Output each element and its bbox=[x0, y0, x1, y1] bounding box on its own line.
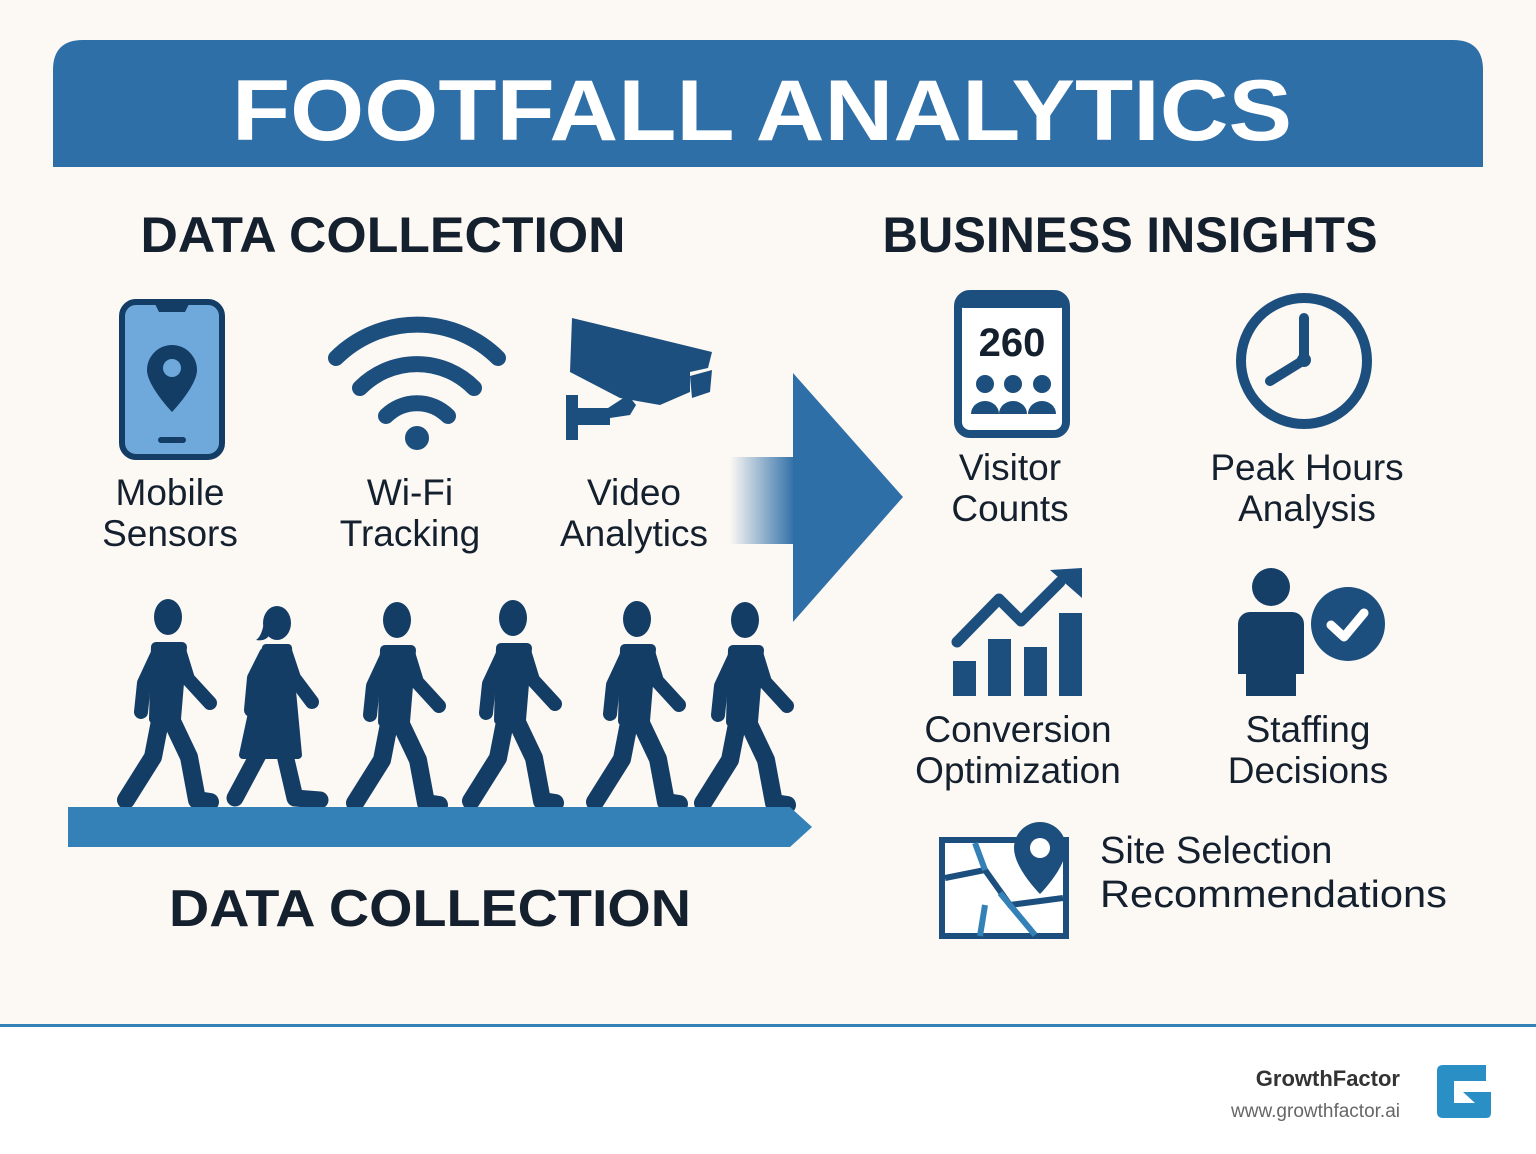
label: visitor counts: Counts bbox=[951, 488, 1069, 529]
label: peak hours analysis: Peak Hours bbox=[1210, 447, 1404, 488]
heading: data collection: DATA COLLECTION bbox=[140, 207, 626, 263]
label: staffing decisions: Staffing bbox=[1246, 709, 1370, 750]
label: mobile sensors: Mobile bbox=[116, 472, 224, 513]
label: mobile sensors: Sensors bbox=[102, 513, 238, 554]
label: peak hours analysis: Analysis bbox=[1238, 488, 1376, 529]
icon: conversion chart bbox=[953, 568, 1082, 696]
icon: visitor counts: 260 bbox=[979, 321, 1045, 365]
label: staffing decisions: Decisions bbox=[1228, 750, 1388, 791]
title: FOOTFALL ANALYTICS bbox=[232, 63, 1292, 159]
label: video analytics: Video bbox=[587, 472, 681, 513]
heading: business insights: BUSINESS INSIGHTS bbox=[882, 207, 1378, 263]
label: site selection: Recommendations bbox=[1100, 874, 1447, 916]
label: wifi tracking: Tracking bbox=[340, 513, 480, 554]
heading: data collection bottom: DATA COLLECTION bbox=[169, 880, 691, 938]
icon: clock bbox=[1241, 298, 1367, 424]
icon: wifi bbox=[336, 325, 498, 444]
title banner bbox=[53, 40, 1483, 167]
icon: staffing bbox=[1238, 568, 1385, 696]
label: conversion optimization: Conversion bbox=[924, 709, 1112, 750]
walkers group bbox=[126, 599, 787, 805]
label: visitor counts: Visitor bbox=[959, 447, 1061, 488]
icon: visitor counts bbox=[958, 294, 1066, 434]
label: video analytics: Analytics bbox=[560, 513, 708, 554]
label: conversion optimization: Optimization bbox=[915, 750, 1121, 791]
ground arrow bar bbox=[68, 807, 812, 847]
label: site selection: Site Selection bbox=[1100, 830, 1332, 872]
footer bbox=[0, 1024, 1536, 1154]
icon: logo G bbox=[1437, 1065, 1491, 1118]
arrow: big flow arrow bbox=[730, 373, 903, 622]
woman walker bbox=[235, 606, 320, 800]
footer brand text: GrowthFactor bbox=[1256, 1066, 1400, 1091]
label: wifi tracking: Wi-Fi bbox=[367, 472, 453, 513]
icon: map with pin bbox=[942, 822, 1066, 936]
icon: video camera bbox=[566, 318, 712, 440]
icon: mobile sensor bbox=[122, 302, 222, 457]
footer: www.growthfactor.ai bbox=[1230, 1101, 1400, 1122]
